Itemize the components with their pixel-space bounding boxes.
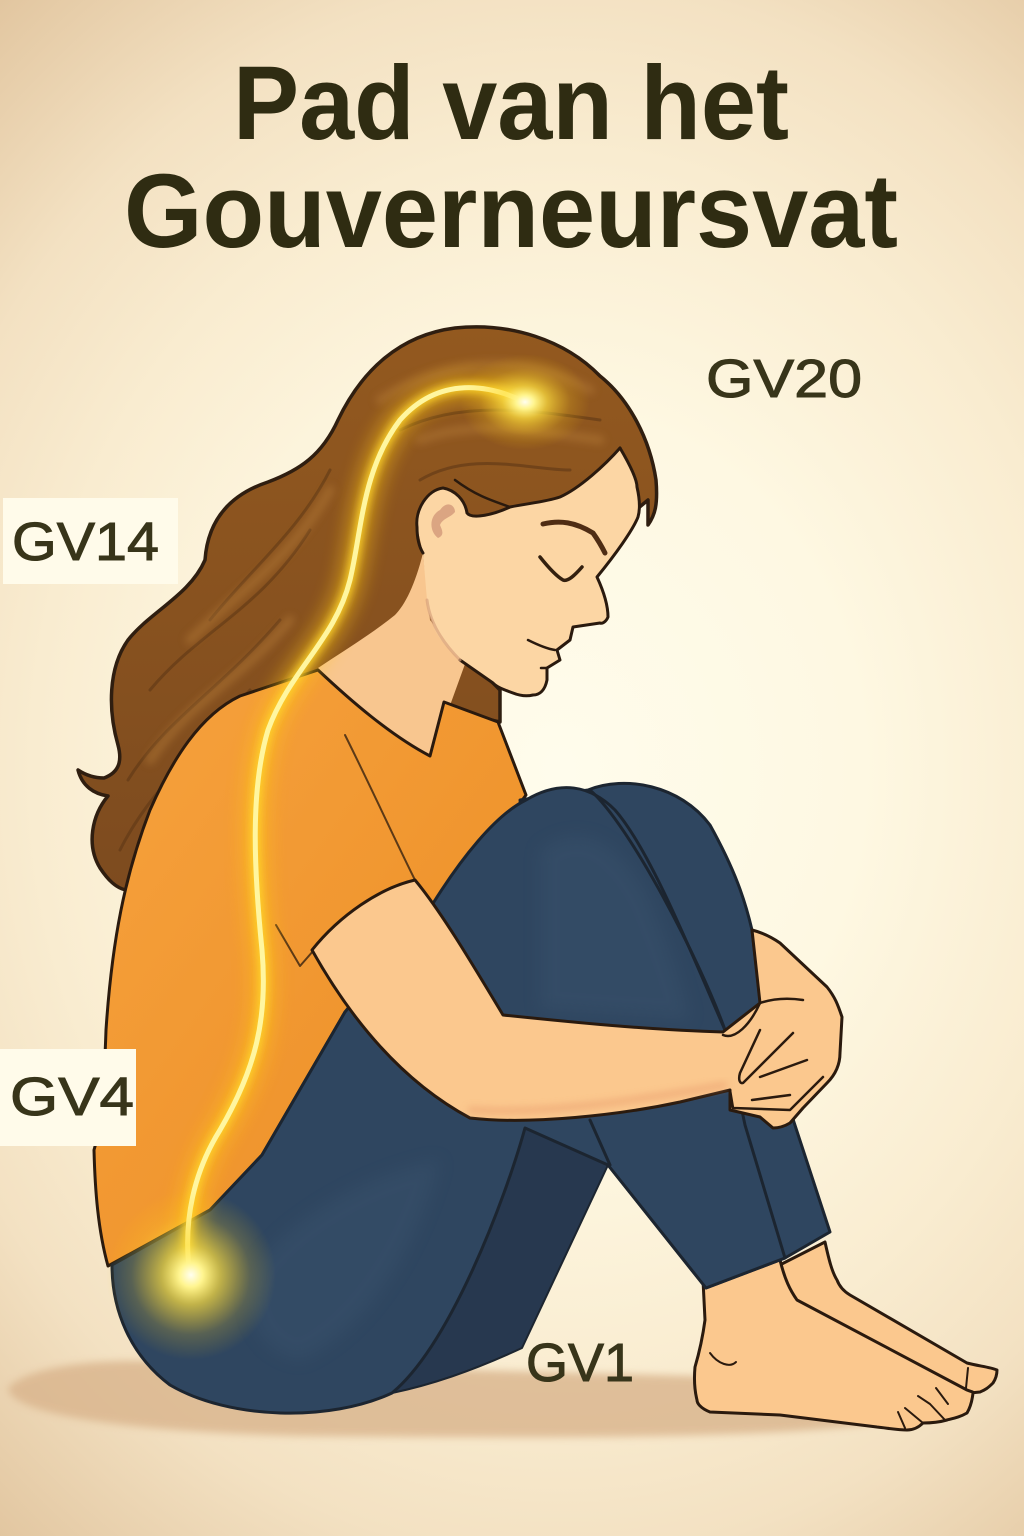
glow point: crown: [460, 354, 590, 450]
glow point: tailbone: [106, 1190, 276, 1360]
under thigh shade: [392, 1128, 608, 1393]
hair highlights: [150, 365, 600, 760]
jaw shading: [427, 600, 460, 660]
label: GV14: GV14: [12, 512, 159, 572]
meridian glow path: [188, 388, 525, 1275]
ear: [417, 448, 620, 553]
label: GV4: [0, 1049, 136, 1146]
shirt: [94, 670, 526, 1266]
eyebrow: [543, 522, 605, 553]
label: GV14: [3, 498, 178, 584]
arm and hand: [312, 880, 842, 1128]
title: Pad van het: [233, 45, 789, 162]
front foot: [694, 1260, 973, 1430]
closed eye: [540, 557, 582, 580]
back foot: [770, 1242, 997, 1400]
figure: [78, 327, 997, 1430]
hair: [78, 327, 657, 890]
toe lines and ankle: [710, 1353, 968, 1428]
title: [124, 45, 898, 270]
floor shadow: [8, 1361, 871, 1437]
neck and face: [318, 448, 639, 775]
label: GV1: GV1: [526, 1333, 634, 1393]
label: GV20: GV20: [706, 349, 862, 409]
pants highlights: [250, 836, 690, 1360]
pants: [112, 783, 830, 1413]
far leg: [520, 783, 830, 1288]
mouth: [528, 640, 555, 650]
near leg and hip: [112, 788, 785, 1413]
shirt fold: [276, 735, 415, 966]
face outline: [460, 448, 639, 696]
title: Gouverneursvat: [124, 153, 898, 270]
hair strands: [120, 410, 600, 850]
label: GV4: GV4: [10, 1067, 134, 1127]
fingers: [723, 999, 823, 1110]
